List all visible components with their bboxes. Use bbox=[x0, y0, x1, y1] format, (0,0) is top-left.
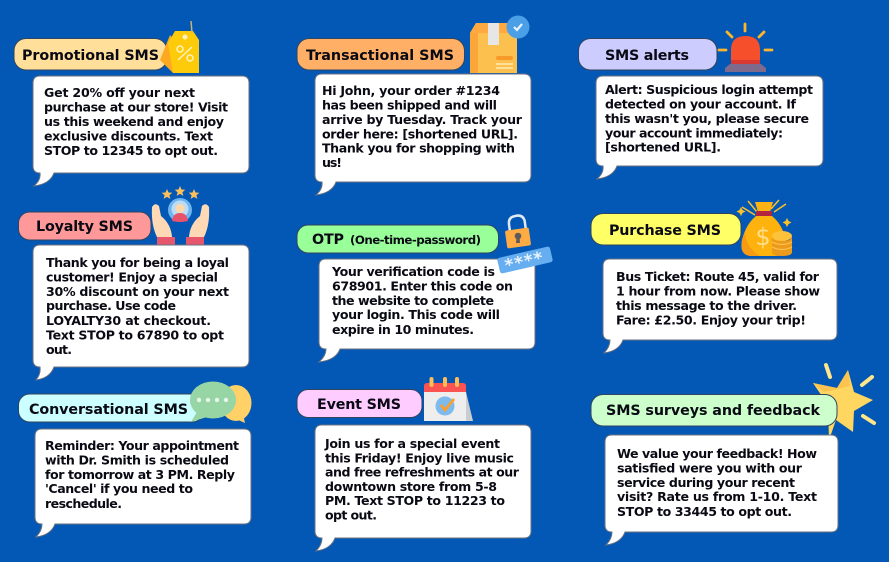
icon: padlock and password: **** bbox=[503, 248, 546, 276]
message bubble: this Friday! Enjoy live music bbox=[325, 450, 514, 466]
icon: parcel box bbox=[470, 16, 530, 73]
heading pill: OTP bbox=[297, 225, 498, 253]
icon: money bag and coins bbox=[736, 200, 792, 256]
message bubble: We value your feedback! How bbox=[617, 446, 817, 461]
icon: hands holding customer bbox=[152, 186, 209, 246]
heading pill: OTP: (One-time-password) bbox=[350, 233, 481, 247]
message bubble: PM. Text STOP to 11223 to bbox=[325, 493, 505, 508]
heading pill: Conversational SMS: Conversational SMS bbox=[29, 402, 188, 418]
heading pill: OTP: OTP bbox=[312, 232, 344, 248]
message bubble: satisfied were you with our bbox=[617, 460, 803, 476]
heading pill: Transactional SMS: Transactional SMS bbox=[306, 48, 454, 64]
message bubble: this wasn't you, please secure bbox=[605, 111, 809, 126]
message bubble bbox=[315, 425, 531, 551]
heading pill: SMS surveys and feedback bbox=[591, 394, 837, 426]
message bubble: purchase at our store! Visit bbox=[44, 100, 228, 114]
message bubble: Text STOP to 67890 to opt bbox=[46, 328, 224, 342]
message bubble: reschedule. bbox=[45, 496, 122, 511]
message bubble: Hi John, your order #1234 bbox=[322, 83, 500, 98]
message bubble: order here: [shortened URL]. bbox=[322, 126, 518, 142]
message bubble: arrive by Tuesday. Track your bbox=[322, 112, 523, 127]
message bubble: your login. This code will bbox=[332, 307, 500, 322]
message bubble: Thank you for shopping with bbox=[322, 140, 515, 156]
panel: purchase SMS bbox=[591, 200, 837, 353]
message bubble: expire in 10 minutes. bbox=[332, 322, 474, 337]
message bubble: for tomorrow at 3 PM. Reply bbox=[45, 467, 235, 482]
message bubble: Thank you for being a loyal bbox=[46, 255, 229, 270]
icon: chat bubbles bbox=[190, 382, 252, 423]
message bubble: 30% discount on your next bbox=[46, 284, 229, 299]
message bubble: Alert: Suspicious login attempt bbox=[605, 82, 813, 97]
icon: money bag and coins: $ bbox=[755, 223, 771, 251]
panel: SMS surveys and feedback bbox=[591, 365, 874, 545]
message bubble bbox=[33, 76, 249, 186]
message bubble: us! bbox=[322, 155, 342, 170]
icon: star with sparkles bbox=[813, 365, 874, 440]
message bubble: Get 20% off your next bbox=[44, 85, 195, 100]
message bubble: us this weekend and enjoy bbox=[44, 114, 224, 129]
message bubble: your account immediately: bbox=[605, 126, 783, 140]
heading pill: Event SMS: Event SMS bbox=[317, 397, 401, 413]
heading pill: Promotional SMS: Promotional SMS bbox=[22, 48, 159, 64]
message bubble: Fare: £2.50. Enjoy your trip! bbox=[616, 312, 806, 328]
message bubble: Join us for a special event bbox=[324, 436, 500, 451]
message bubble: exclusive discounts. Text bbox=[44, 128, 213, 144]
message bubble bbox=[319, 259, 535, 362]
message bubble bbox=[596, 76, 823, 179]
heading pill: Conversational SMS bbox=[18, 394, 204, 422]
heading pill: Loyalty SMS: Loyalty SMS bbox=[36, 219, 133, 235]
message bubble: and free refreshments at our bbox=[325, 464, 520, 480]
heading pill: SMS alerts: SMS alerts bbox=[605, 48, 689, 64]
message bubble bbox=[315, 74, 531, 195]
panel: SMS alerts bbox=[578, 24, 823, 179]
panel: conversational SMS bbox=[18, 382, 252, 537]
icon: calendar bbox=[424, 377, 473, 421]
heading pill: Purchase SMS: Purchase SMS bbox=[609, 223, 721, 239]
message bubble: the website to complete bbox=[332, 293, 494, 308]
message bubble bbox=[603, 259, 837, 353]
message bubble: has been shipped and will bbox=[322, 98, 497, 112]
message bubble: customer! Enjoy a special bbox=[46, 270, 218, 284]
panel: OTP SMS bbox=[297, 215, 553, 362]
message bubble: STOP to 33445 to opt out. bbox=[617, 504, 792, 519]
icon: padlock and password bbox=[497, 215, 553, 276]
icon: discount tag bbox=[160, 21, 199, 73]
message bubble: 1 hour from now. Please show bbox=[616, 284, 820, 298]
heading pill: Loyalty SMS bbox=[18, 212, 151, 240]
heading pill: Transactional SMS bbox=[297, 38, 464, 70]
message bubble: service during your recent bbox=[617, 475, 795, 490]
heading pill: Promotional SMS bbox=[14, 38, 167, 70]
message bubble bbox=[35, 429, 251, 537]
message bubble: Your verification code is bbox=[331, 264, 495, 279]
message bubble: out. bbox=[46, 342, 72, 357]
panel: loyalty SMS bbox=[18, 186, 249, 380]
icon: siren light bbox=[719, 24, 772, 72]
message bubble: Reminder: Your appointment bbox=[45, 438, 239, 453]
message bubble: this message to the driver. bbox=[616, 298, 797, 313]
message bubble: purchase. Use code bbox=[46, 298, 176, 313]
message bubble: with Dr. Smith is scheduled bbox=[45, 452, 229, 468]
message bubble: detected on your account. If bbox=[605, 96, 797, 112]
panel: transactional SMS bbox=[297, 16, 531, 195]
message bubble: STOP to 12345 to opt out. bbox=[44, 143, 218, 158]
heading pill: SMS alerts bbox=[578, 38, 717, 70]
message bubble: visit? Rate us from 1-10. Text bbox=[617, 489, 817, 504]
message bubble: downtown store from 5-8 bbox=[325, 479, 497, 494]
message bubble: LOYALTY30 at checkout. bbox=[46, 313, 211, 328]
heading pill: Purchase SMS bbox=[591, 214, 741, 245]
message bubble bbox=[605, 435, 838, 545]
panel: event SMS bbox=[297, 377, 531, 551]
heading pill: Event SMS bbox=[297, 390, 422, 418]
message bubble: [shortened URL]. bbox=[605, 140, 721, 154]
message bubble: opt out. bbox=[325, 508, 377, 522]
message bubble: Bus Ticket: Route 45, valid for bbox=[616, 269, 820, 284]
heading pill: SMS surveys and feedback: SMS surveys and feedback bbox=[606, 403, 820, 419]
message bubble bbox=[33, 245, 249, 380]
message bubble: 'Cancel' if you need to bbox=[45, 481, 193, 496]
message bubble: 678901. Enter this code on bbox=[332, 278, 513, 294]
panel: promotional SMS bbox=[14, 21, 249, 186]
